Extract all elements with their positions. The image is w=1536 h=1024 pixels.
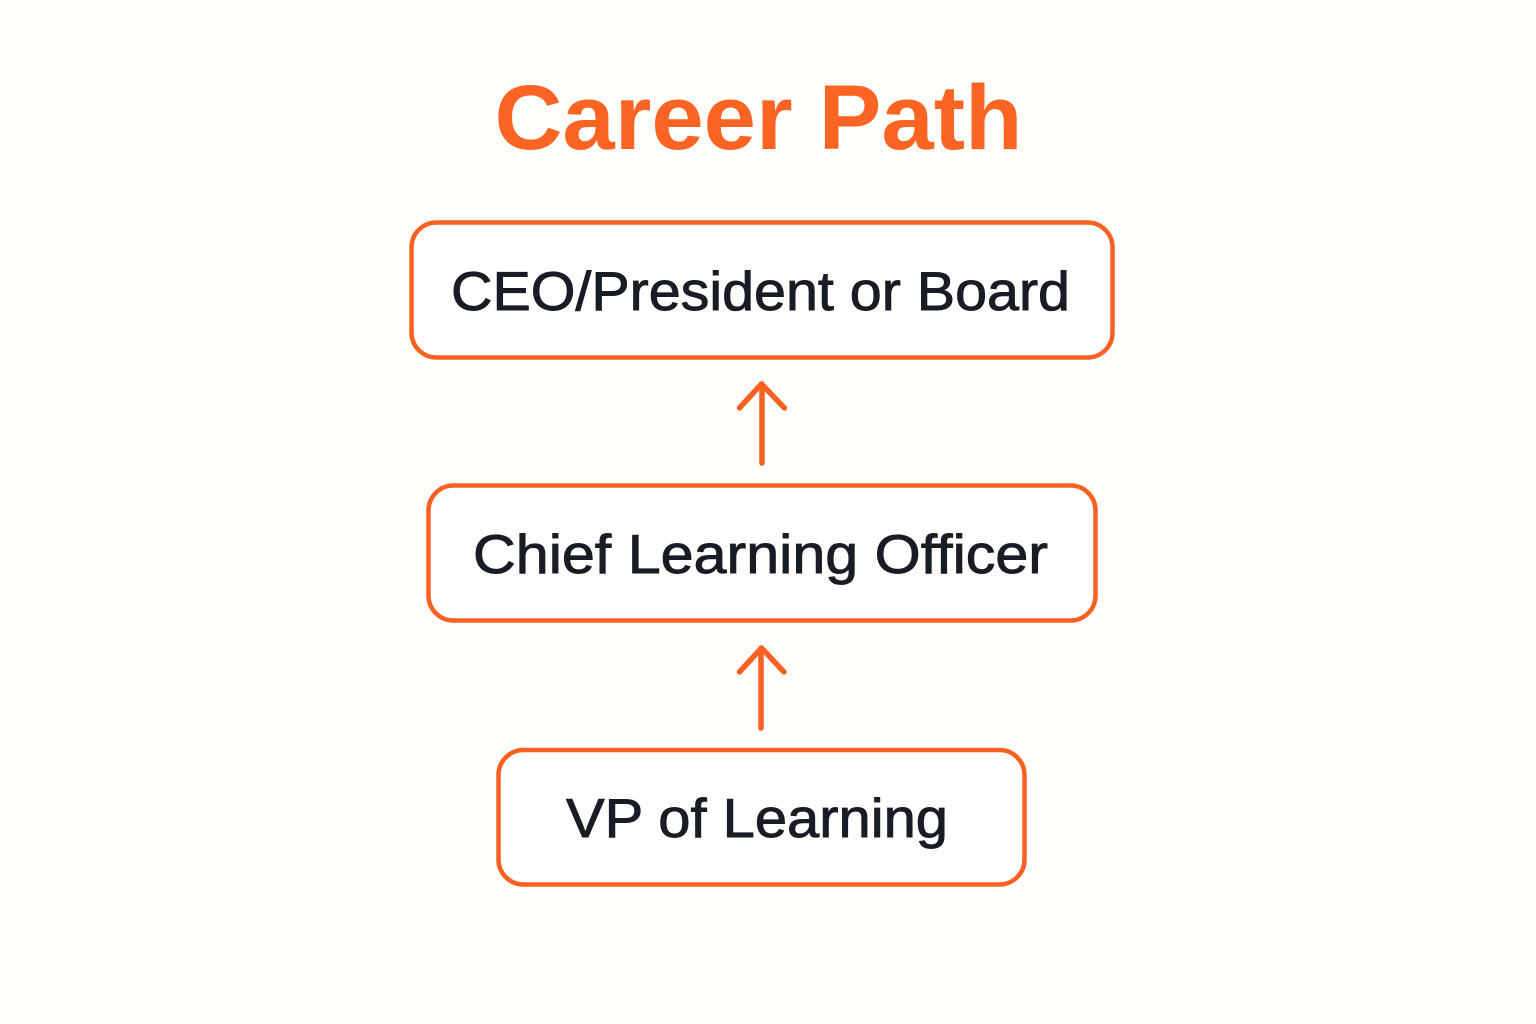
- title: Career Path: [494, 67, 1022, 169]
- box: VP of Learning: VP of Learning: [566, 787, 948, 849]
- arrow: Chief Learning Officer to CEO: [740, 384, 784, 463]
- box: Chief Learning Officer: Chief Learning Officer: [473, 523, 1048, 585]
- box: CEO/President or Board: [412, 222, 1112, 358]
- box: Chief Learning Officer: [428, 486, 1096, 620]
- box: CEO/President or Board: CEO/President or Board: [451, 260, 1070, 322]
- arrow: VP of Learning to Chief Learning Officer: [740, 648, 784, 728]
- box: VP of Learning: [498, 750, 1024, 884]
